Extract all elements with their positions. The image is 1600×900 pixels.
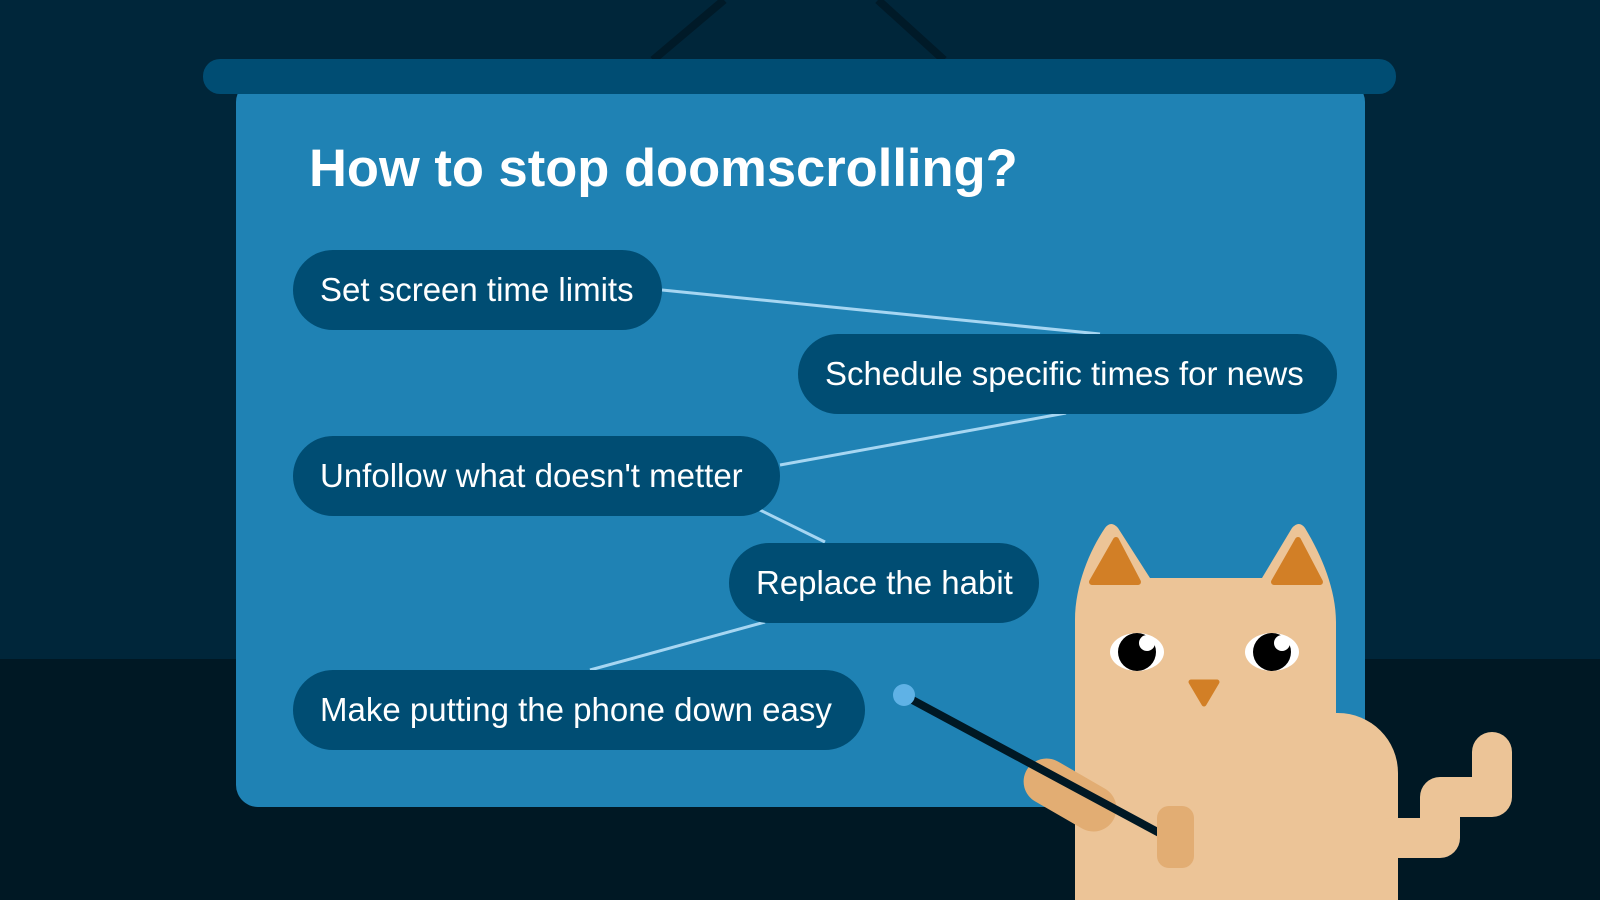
pill: unfollow [293,436,780,516]
paw [1157,806,1194,868]
pill: set screen time limits: Set screen time limits [320,271,634,308]
ears [1092,540,1138,582]
pill: unfollow: Unfollow what doesn't metter [320,457,743,494]
nose [1191,682,1217,704]
pill: set screen time limits [293,250,662,330]
cat character with pointer [893,524,1492,900]
pointer stick [893,684,1165,836]
pill: replace the habit: Replace the habit [756,564,1013,601]
pill: schedule specific times for news: Schedule specific times for news [825,355,1304,392]
pill: make putting phone down easy [293,670,865,750]
pill: replace the habit [729,543,1039,623]
title: How to stop doomscrolling? [309,139,1018,198]
pill: make putting phone down easy: Make putting the phone down easy [320,691,832,728]
pill: schedule specific times for news [798,334,1337,414]
panel: projection screen [203,59,1396,807]
connector lines [590,290,1100,670]
cat body [1075,524,1336,900]
screen roller bar [203,59,1396,94]
arm [1015,750,1125,840]
tail [1390,752,1492,838]
eyes [1110,633,1164,671]
